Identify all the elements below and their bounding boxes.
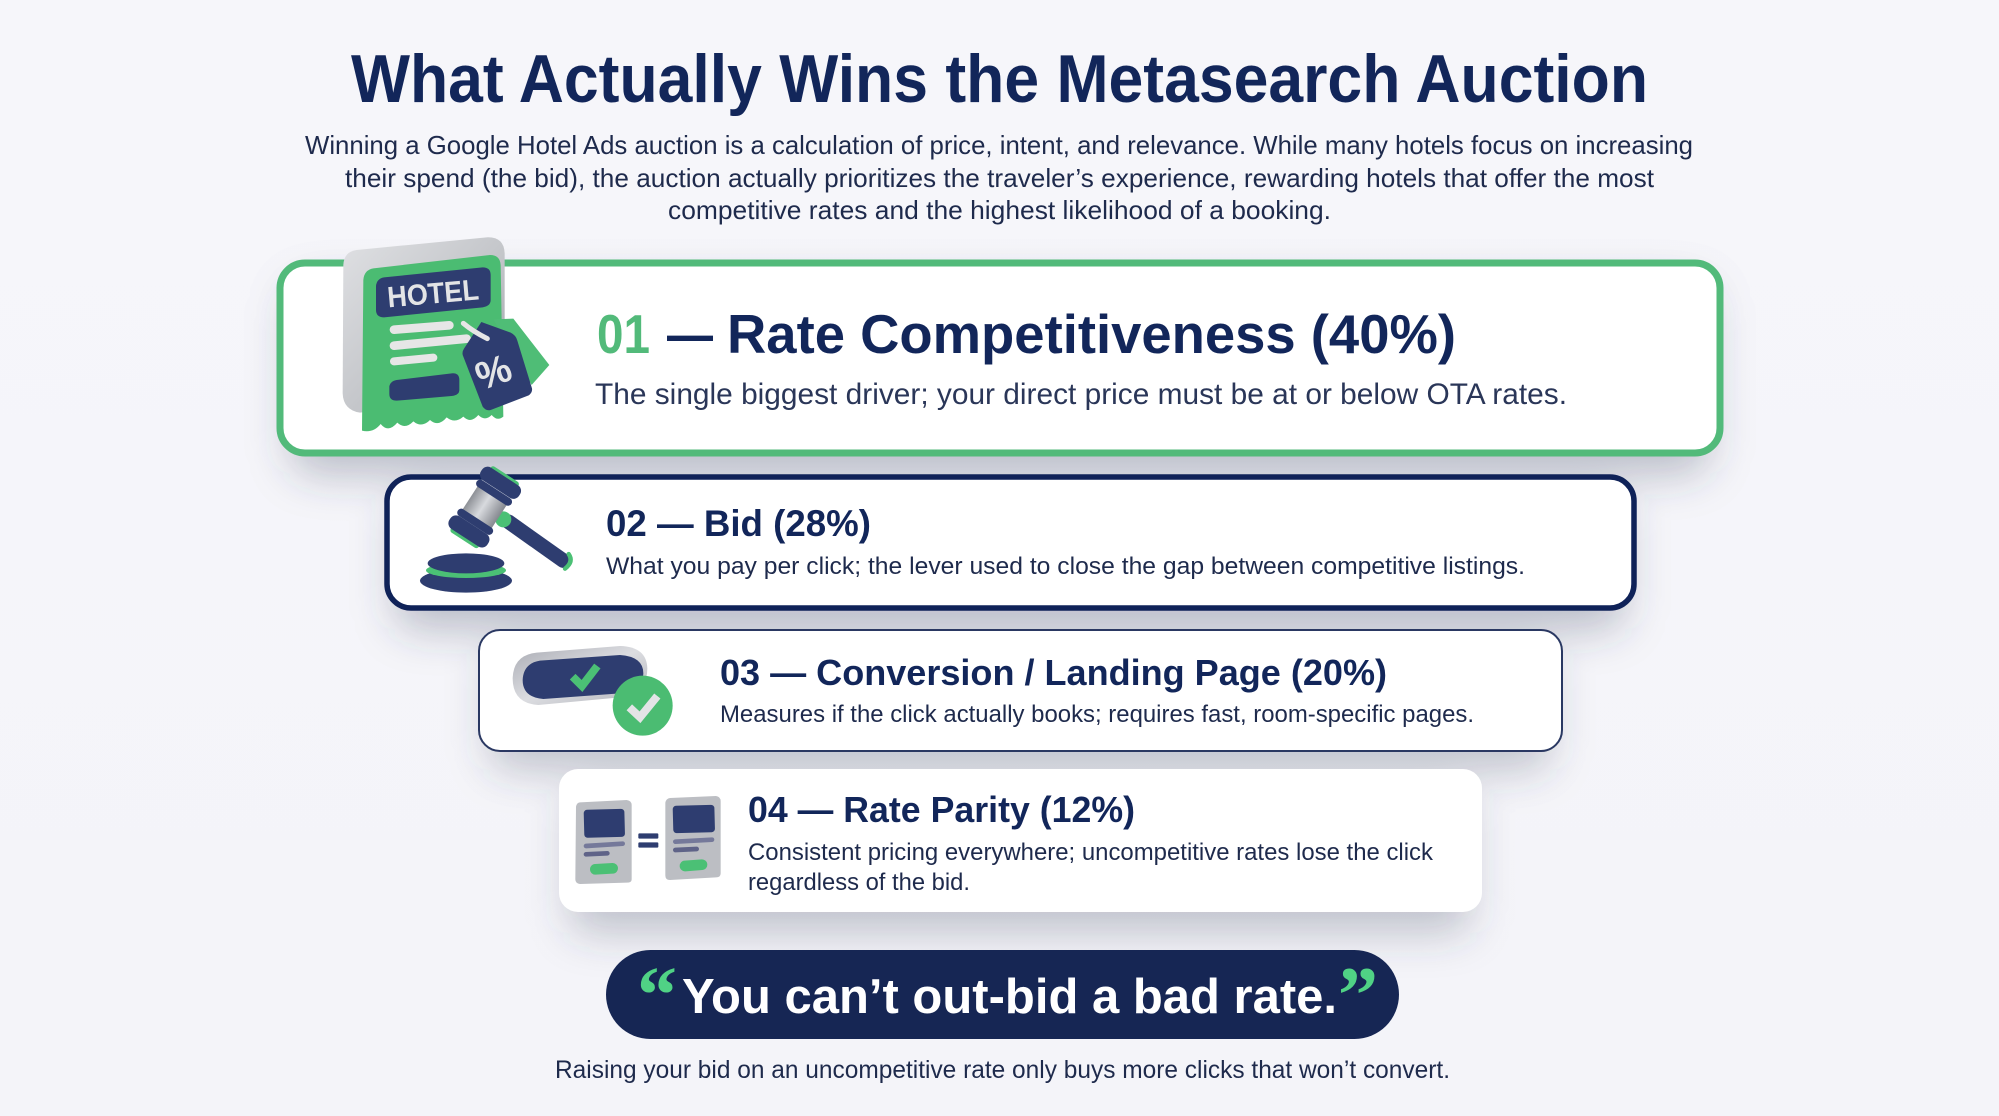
icon: hotel receipt with percent tag: % — [470, 346, 518, 399]
heading: 04: 04 — Rate Parity (12%) — [748, 789, 1135, 830]
intro paragraph: competitive rates and the highest likelihood of a booking. — [668, 195, 1331, 225]
intro paragraph: their spend (the bid), the auction actually prioritizes the traveler’s experience, rewarding hotels that offer the most — [345, 163, 1655, 193]
heading: 02: 02 — Bid (28%) — [606, 503, 871, 544]
description: 01: The single biggest driver; your direct price must be at or below OTA rates. — [595, 378, 1567, 411]
panel: 03 conversion / landing page — [479, 630, 1562, 751]
icon: toggle with check marks — [513, 646, 673, 736]
title: What Actually Wins the Metasearch Auction — [351, 41, 1648, 117]
icon: hotel receipt with percent tag — [343, 237, 549, 431]
intro paragraph: Winning a Google Hotel Ads auction is a calculation of price, intent, and relevance. While many hotels focus on increasing — [305, 130, 1693, 160]
description: 03: Measures if the click actually books; requires fast, room-specific pages. — [720, 701, 1474, 728]
heading: 01: Rate Competitiveness (40%) — [727, 303, 1456, 365]
description: 02: What you pay per click; the lever used to close the gap between competitive listings. — [606, 553, 1525, 580]
callout: quote pill — [606, 950, 1399, 1040]
panel: 01 rate competitiveness — [280, 237, 1720, 453]
closing quote mark: ” — [1338, 952, 1378, 1040]
heading: 01: 01 — [597, 303, 650, 365]
heading: 03: 03 — Conversion / Landing Page (20%) — [720, 652, 1387, 693]
heading: 01: — — [667, 303, 713, 365]
quote text: You can’t out-bid a bad rate. — [682, 970, 1337, 1024]
description: 04 — [748, 839, 1434, 896]
icon: gavel — [420, 462, 571, 593]
opening quote mark: “ — [637, 952, 677, 1040]
footnote: Raising your bid on an uncompetitive rate only buys more clicks that won’t convert. — [555, 1056, 1450, 1084]
panel: 02 bid — [387, 462, 1634, 608]
panel: 04 rate parity — [559, 769, 1482, 912]
icon: hotel receipt with percent tag: HOTEL — [386, 273, 480, 314]
description: 04: regardless of the bid. — [748, 869, 970, 896]
icon: matching rate cards — [575, 796, 721, 884]
intro paragraph — [305, 130, 1693, 225]
description: 04: Consistent pricing everywhere; uncompetitive rates lose the click — [748, 839, 1434, 866]
